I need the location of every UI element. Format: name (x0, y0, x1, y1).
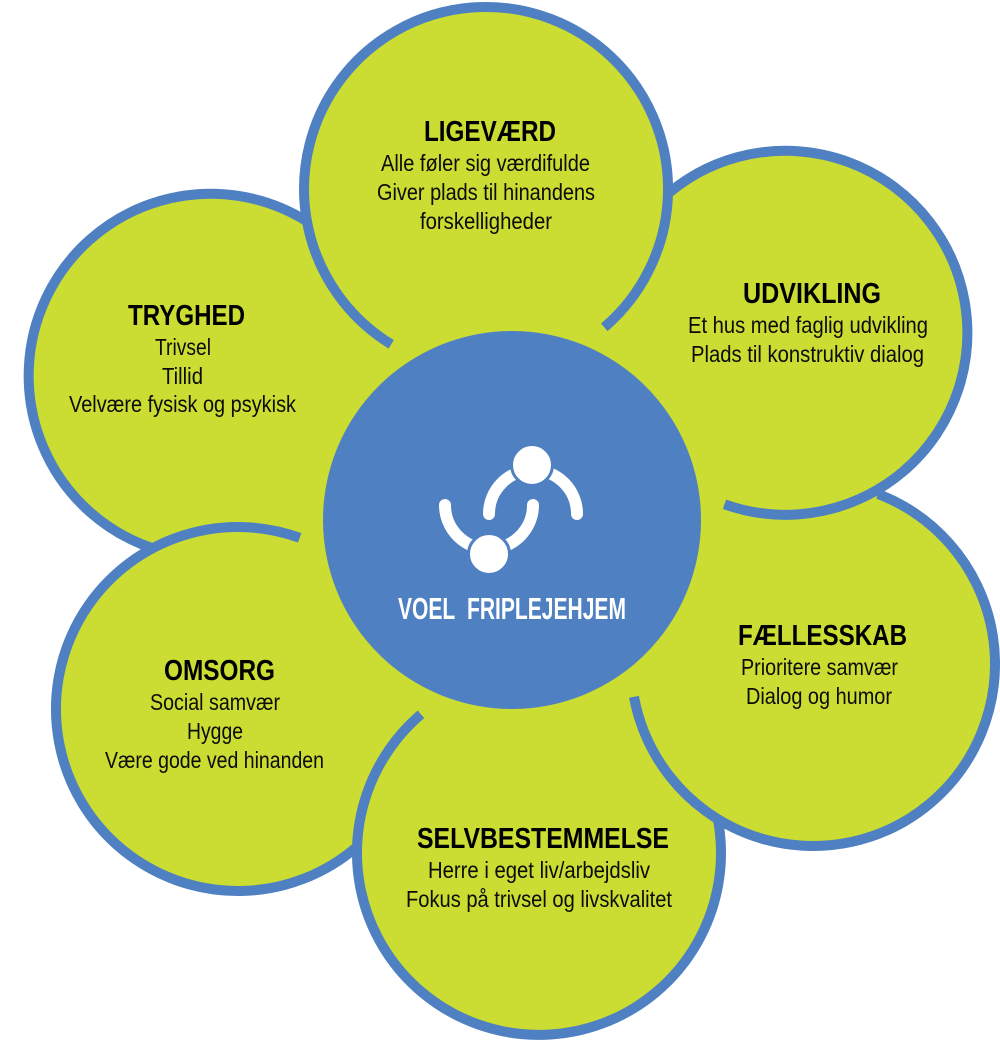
heading: udvikling: UDVIKLING (743, 278, 881, 310)
heading: omsorg: OMSORG (164, 655, 275, 687)
heading: tryghed: TRYGHED (128, 300, 245, 332)
panel: ligeværd (377, 116, 595, 234)
icon: voel friplejehjem logo (445, 444, 577, 574)
text: giver plads til hinandens: Giver plads til hinandens (377, 179, 595, 205)
heading: fællesskab: FÆLLESSKAB (738, 620, 907, 652)
panel: tryghed (69, 300, 296, 417)
text: social samvær: Social samvær (150, 689, 280, 715)
panel: udvikling (688, 278, 928, 367)
text: trivsel: Trivsel (155, 334, 211, 360)
heading: ligeværd: LIGEVÆRD (424, 116, 556, 148)
text: dialog og humor: Dialog og humor (746, 683, 892, 709)
center circle (323, 331, 701, 709)
text: prioritere samvær: Prioritere samvær (741, 654, 898, 680)
text: være gode ved hinanden: Være gode ved hinanden (105, 747, 324, 773)
panel: fællesskab (738, 620, 907, 709)
text: hygge: Hygge (187, 718, 243, 744)
text: plads til konstruktiv dialog: Plads til konstruktiv dialog (691, 341, 924, 367)
text: et hus med faglig udvikling: Et hus med faglig udvikling (688, 312, 928, 338)
text: velvære fysisk og psykisk: Velvære fysisk og psykisk (69, 391, 296, 417)
text: forskelligheder: forskelligheder (420, 208, 552, 234)
text: alle føler sig værdifulde: Alle føler sig værdifulde (381, 150, 590, 176)
text: tillid: Tillid (162, 363, 203, 389)
text: herre i eget liv/arbejdsliv: Herre i eget liv/arbejdsliv (428, 857, 650, 883)
text: fokus på trivsel og livskvalitet: Fokus på trivsel og livskvalitet (406, 886, 673, 912)
heading: selvbestemmelse: SELVBESTEMMELSE (417, 823, 669, 855)
panel: selvbestemmelse (406, 823, 673, 912)
panel: omsorg (105, 655, 324, 773)
center title: VOEL FRIPLEJEHJEM (398, 591, 626, 626)
